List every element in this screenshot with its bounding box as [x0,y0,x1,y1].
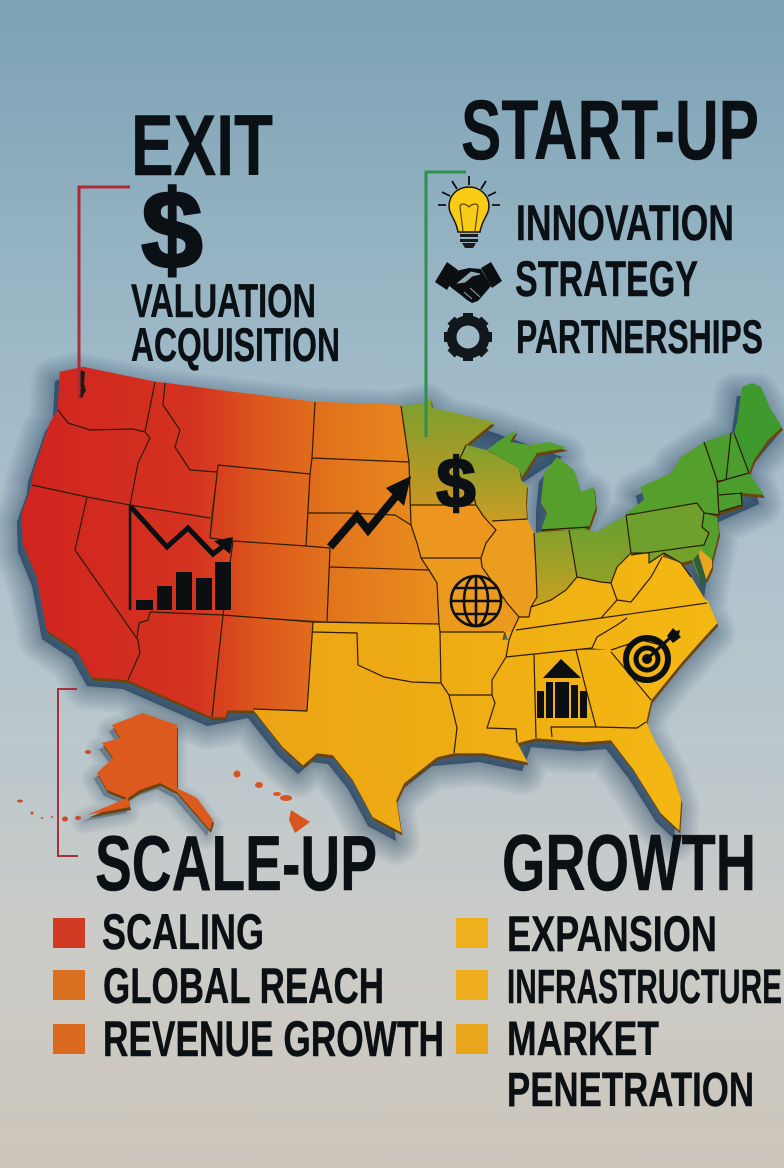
icon: dollar on map: $ [437,444,475,522]
text: valuation: VALUATION [131,274,316,327]
icon: rising arrow [330,476,411,547]
legend square: infrastructure [456,970,488,1000]
icon: bar and line chart [130,505,233,610]
legend square: global reach [53,970,85,1000]
icon: globe [451,576,501,626]
alaska soft shadow [84,719,210,836]
icon: handshake [435,262,502,303]
legend square: market penetration [456,1024,488,1054]
leader line: start-up [426,172,466,437]
legend square: scaling [53,918,85,948]
icon: large dollar: $ [141,169,203,292]
puget sound notch [78,370,86,398]
legend square: revenue growth [53,1024,85,1054]
heading: scale-up: SCALE-UP [95,819,377,907]
alaska [87,713,213,830]
text: strategy: STRATEGY [515,251,698,307]
leader line: scale-up [58,689,78,856]
icon: gear [444,313,492,361]
northeast states: start-up region [487,383,782,583]
aleutian islands [17,750,91,822]
hawaii [234,770,310,833]
chesapeake bay notch [693,554,707,586]
map soft shadow [17,376,777,841]
map of the United States [17,367,782,841]
icon: target with arrow [626,628,681,680]
midwest states [401,398,631,632]
icon: buildings with up arrow [537,659,587,718]
leader line: exit [79,187,130,396]
text: scaling: SCALING [102,904,264,960]
west states: exit and scale-up region [22,367,439,717]
heading: exit: EXIT [131,98,273,194]
text: acquisition: ACQUISITION [131,318,340,371]
south states: growth region [253,553,717,832]
legend square: expansion [456,918,488,948]
state borders [32,382,749,753]
icon: light bulb [438,176,500,248]
text: global reach: GLOBAL REACH [103,958,384,1014]
text: market: MARKET [507,1013,659,1066]
text: revenue growth: REVENUE GROWTH [103,1011,444,1067]
